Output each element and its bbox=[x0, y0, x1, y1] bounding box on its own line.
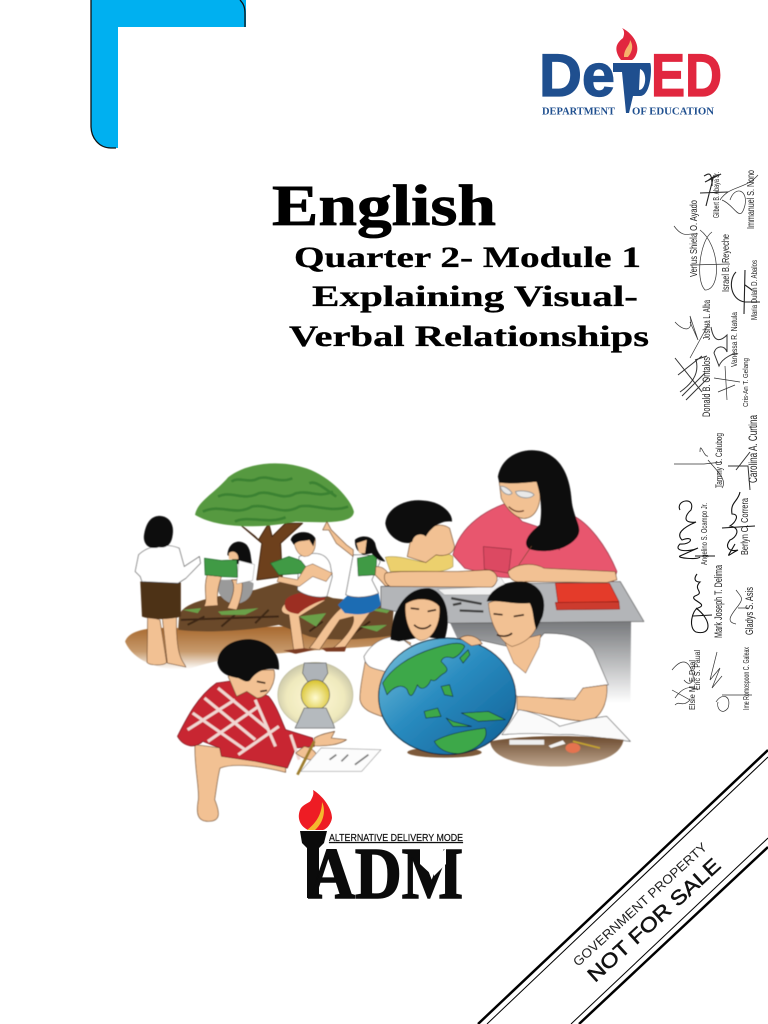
boy head bbox=[407, 525, 455, 563]
signature strokes bbox=[672, 174, 760, 711]
red books bbox=[555, 583, 620, 610]
pencils on desk bbox=[451, 598, 483, 611]
child hand bbox=[296, 731, 346, 760]
signature names: Gladys S. Asis bbox=[744, 587, 756, 635]
child writing bbox=[177, 639, 381, 821]
signature names: Maria Dulah D. Abalos bbox=[749, 260, 759, 320]
child robe bbox=[177, 680, 314, 768]
teacher hair bbox=[498, 450, 579, 551]
signature names: Vanessa R. Natula bbox=[729, 312, 739, 367]
signature names: Berlyn C. Correra bbox=[740, 498, 751, 555]
teacher hand and pencil bbox=[508, 546, 617, 583]
globe hand bbox=[460, 636, 482, 646]
child features bbox=[257, 681, 267, 691]
tree bbox=[195, 463, 354, 580]
title: English bbox=[272, 173, 496, 238]
signature names: Ime Romospoon C. Galeax bbox=[742, 647, 751, 710]
globe bbox=[379, 636, 516, 758]
signature names: Mark Joseph T. Delima bbox=[713, 564, 725, 638]
robe pattern bbox=[188, 688, 299, 760]
child hair bbox=[217, 639, 279, 682]
canopy shading bbox=[203, 478, 348, 522]
girl reading under tree bbox=[204, 542, 255, 610]
signature names bbox=[687, 170, 760, 710]
teacher face bbox=[499, 482, 540, 518]
ground shadow bbox=[125, 625, 397, 669]
signature names: Israel B. Reyeche bbox=[721, 234, 732, 292]
subtitle: quarter and module: Quarter 2- Module 1 bbox=[294, 241, 641, 274]
tree canopy bbox=[195, 463, 354, 526]
boy tshirt bbox=[478, 633, 608, 698]
DepED logo bbox=[539, 28, 722, 118]
teacher bbox=[453, 450, 617, 583]
not for sale ribbon bbox=[478, 750, 768, 1024]
desk top bbox=[381, 582, 644, 623]
signature names: Carolina A. Curtina bbox=[746, 415, 760, 483]
girl with globe bbox=[360, 588, 448, 716]
paper on desk bbox=[438, 577, 505, 595]
subtitle: topic line 2: Verbal Relationships bbox=[289, 320, 649, 353]
child paper bbox=[301, 748, 381, 771]
ribbon lines bbox=[478, 750, 768, 1024]
boy head bbox=[488, 598, 539, 646]
child pencil bbox=[297, 741, 314, 775]
signature names: Joshua L. Alba bbox=[702, 300, 713, 340]
ADM book notch bbox=[420, 848, 446, 876]
girl face bbox=[405, 599, 440, 640]
boy at desk bbox=[384, 500, 497, 587]
girl features bbox=[411, 608, 436, 629]
logo caption right: OF EDUCATION bbox=[632, 106, 715, 118]
subtitle: topic line 1: Explaining Visual- bbox=[312, 280, 638, 313]
boy features bbox=[493, 614, 524, 636]
boy neck bbox=[505, 635, 541, 673]
ribbon text top: GOVERNMENT PROPERTY bbox=[570, 839, 710, 969]
signature names: Tammy C. Calubog bbox=[714, 433, 724, 488]
ADM flame bbox=[299, 790, 332, 830]
signatures column bbox=[672, 170, 760, 711]
ADM logo bbox=[299, 790, 463, 914]
logo letters De: De bbox=[539, 42, 615, 109]
rock platform bbox=[178, 582, 394, 640]
lantern glow bbox=[278, 662, 353, 727]
ADM caption: ALTERNATIVE DELIVERY MODE bbox=[329, 832, 463, 844]
standing girl bbox=[135, 516, 200, 667]
teacher smile bbox=[509, 507, 524, 512]
girl arm and shirt bbox=[360, 639, 411, 716]
desk front bbox=[450, 621, 631, 703]
boy reading bbox=[270, 532, 332, 654]
open book bbox=[502, 710, 630, 741]
signature names: Venus Shiela O. Ayado bbox=[689, 200, 700, 277]
lantern bbox=[278, 662, 353, 728]
signature names: Gilbert B. Abaya Jr. bbox=[712, 172, 721, 218]
boy shirt bbox=[385, 553, 453, 572]
globe base shadow bbox=[407, 747, 482, 758]
desk bbox=[381, 577, 644, 703]
signature names: Eric S. Paual bbox=[692, 650, 702, 690]
child leg bbox=[195, 745, 286, 821]
boy arm bbox=[384, 570, 497, 587]
teacher glasses bbox=[500, 486, 534, 498]
table shadow with stationery bbox=[490, 736, 624, 767]
signature names: Donald B. Ontalos bbox=[701, 357, 713, 417]
girl hair bbox=[390, 588, 448, 641]
child head bbox=[228, 670, 275, 698]
ribbon text bottom: NOT FOR SALE bbox=[584, 854, 725, 987]
ADM letters: ADM bbox=[308, 833, 463, 914]
logo letters ED: ED bbox=[651, 42, 722, 109]
globe sphere bbox=[379, 638, 516, 755]
signature names: Angelino S. Ocampo Jr. bbox=[700, 503, 709, 565]
signature names: Elsie M. E Daal bbox=[687, 660, 697, 710]
boy hair bbox=[385, 500, 452, 543]
ADM torch bbox=[300, 831, 327, 898]
signature names: Cris-An T. Gelang bbox=[741, 358, 750, 407]
corner bracket outline bbox=[91, 0, 245, 148]
tree trunk bbox=[237, 522, 303, 580]
teacher shirt bbox=[453, 503, 617, 582]
lantern glass bbox=[301, 680, 330, 710]
corner bracket bbox=[91, 0, 246, 148]
lantern cap bbox=[303, 663, 328, 681]
boy with globe bbox=[478, 581, 630, 767]
boy hair bbox=[487, 581, 544, 630]
continents bbox=[383, 643, 465, 696]
girl with raised arm bbox=[309, 522, 391, 651]
illustration: learners and teacher bbox=[125, 450, 644, 821]
boy right arm bbox=[517, 685, 607, 721]
teacher pocket bbox=[483, 547, 511, 573]
logo torch bbox=[613, 28, 651, 113]
lantern base bbox=[295, 708, 335, 728]
signature names: Immanuel S. Nono bbox=[746, 170, 757, 229]
logo caption left: DEPARTMENT bbox=[542, 106, 615, 118]
